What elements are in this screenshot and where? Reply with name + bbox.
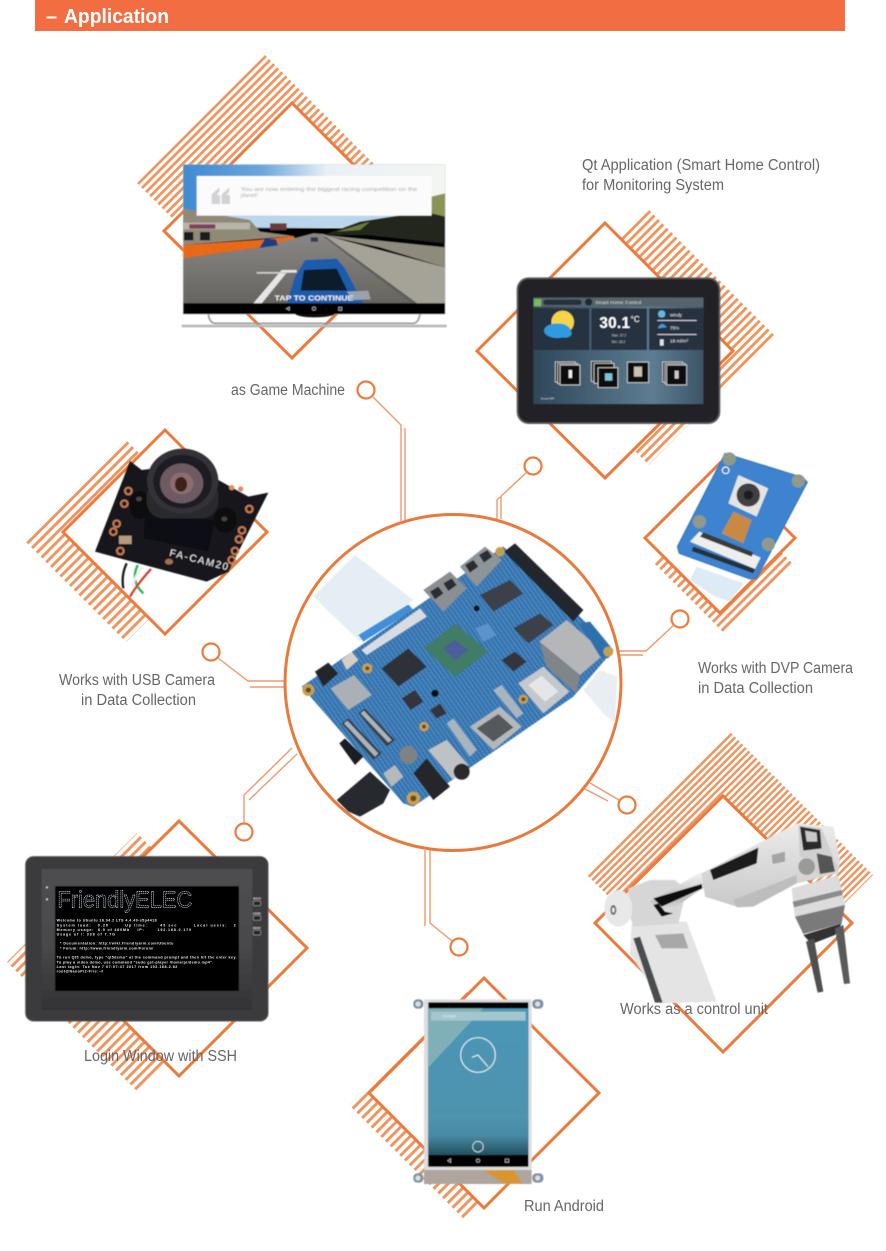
connector: game machine [358, 382, 405, 521]
device: SSH terminal tablet: MENU [253, 926, 261, 930]
device: TV [182, 165, 447, 327]
terminal text: * Forum: http://www.friendlyarm.com/Forum/ [60, 946, 153, 950]
caption: USB camera: in Data Collection [81, 692, 196, 709]
device: robot arm [604, 823, 850, 1003]
quote marks icon [212, 187, 230, 204]
connector: USB camera [202, 644, 285, 687]
silkscreen label: FA-CAM20 [168, 548, 230, 573]
weather icon [544, 311, 574, 338]
device: touch tablet with smart home UI: Max: 37.2 [612, 334, 626, 338]
device: touch tablet with smart home UI: 18 ml/m³ [670, 339, 689, 344]
game dialog text [241, 187, 417, 199]
central circle with board [285, 514, 621, 850]
terminal text: root@NanoPi2-Fire:~# [57, 970, 103, 974]
connector: Android [425, 850, 468, 956]
terminal text: To play a video demo, use command "sudo gst-player /home/pi/demo.mp4". [57, 960, 213, 964]
terminal text [57, 919, 237, 974]
diamond: DVP camera [645, 463, 795, 632]
device: touch tablet with smart home UI [517, 277, 720, 424]
diamond: game machine [137, 55, 420, 358]
terminal text: Memory usage: 6.9 of 460Mb IP: 192.168.2.170 [57, 928, 191, 932]
device: Android touch display: Google [443, 1014, 457, 1019]
terminal text: Usage of /: 338 of 7.7G [57, 932, 115, 936]
game dialog text: You are now entering the biggest racing competition on the [241, 187, 417, 193]
connector: SSH [236, 748, 297, 840]
diamond: USB camera [25, 430, 267, 642]
device: SSH terminal tablet [26, 857, 268, 1021]
terminal text: To run Qt5 demo, type "qt5demo" at the command prompt and then hit the enter key. [57, 956, 237, 960]
diamond: Android [349, 978, 599, 1220]
device: touch tablet with smart home UI: °C [631, 315, 640, 324]
device: USB camera module [95, 449, 268, 597]
caption: Qt application [582, 157, 820, 194]
diamond: control unit [587, 732, 873, 1052]
connector: control unit [585, 783, 636, 814]
terminal text: System load: 0.20 Up time: 45 sec Local users: 2 [57, 923, 236, 927]
terminal text: * Documentation: http://wiki.friendlyarm.com/Ubuntu [60, 942, 173, 946]
diamond: SSH [7, 821, 307, 1091]
device: touch tablet with smart home UI: Smart API [541, 396, 554, 400]
caption: DVP camera: Works with DVP Camera [698, 660, 853, 677]
home control icons [555, 361, 687, 388]
caption: Android: Run Android [524, 1198, 604, 1215]
caption: SSH: Login Window with SSH [84, 1048, 237, 1065]
heading dash: – [46, 6, 57, 28]
tap to continue: TAP TO CONTINUE [275, 295, 354, 302]
caption: USB camera [59, 672, 215, 709]
diamond: Qt application [477, 210, 776, 478]
device: SSH terminal tablet: BACK [253, 897, 261, 901]
temperature: 30.1 [599, 315, 630, 332]
device: Android touch display [413, 999, 543, 1184]
caption: DVP camera: in Data Collection [698, 680, 813, 697]
terminal banner: FriendlyELEC [57, 886, 192, 912]
device: DVP camera module [677, 452, 807, 602]
status bar title: Smart Home Control [595, 300, 641, 305]
caption: control unit: Works as a control unit [620, 1001, 769, 1018]
caption: Qt application: for Monitoring System [582, 177, 724, 194]
device: touch tablet with smart home UI: 75% [670, 325, 679, 330]
device: touch tablet with smart home UI: Min: 28.2 [612, 340, 626, 344]
weather stats: windy [670, 312, 683, 317]
connector: DVP camera [617, 610, 688, 655]
board photo [302, 543, 617, 817]
device: SSH terminal tablet: HOME [253, 911, 261, 915]
caption: DVP camera [698, 660, 853, 697]
heading: Application: Application [64, 6, 169, 28]
game dialog text: planet! [241, 193, 258, 199]
caption: Qt application: Qt Application (Smart Home Control) [582, 157, 820, 174]
header bar [35, 0, 845, 31]
connector: Qt application [497, 458, 542, 520]
caption: as Game Machine: as Game Machine [231, 382, 345, 399]
terminal text: Welcome to Ubuntu 16.04.2 LTS 4.4.49-s5p4418 [57, 919, 157, 923]
terminal text: Last login: Tue Nov 7 07:07:47 2017 from 192.168.2.62 [57, 965, 177, 969]
caption: USB camera: Works with USB Camera [59, 672, 215, 689]
